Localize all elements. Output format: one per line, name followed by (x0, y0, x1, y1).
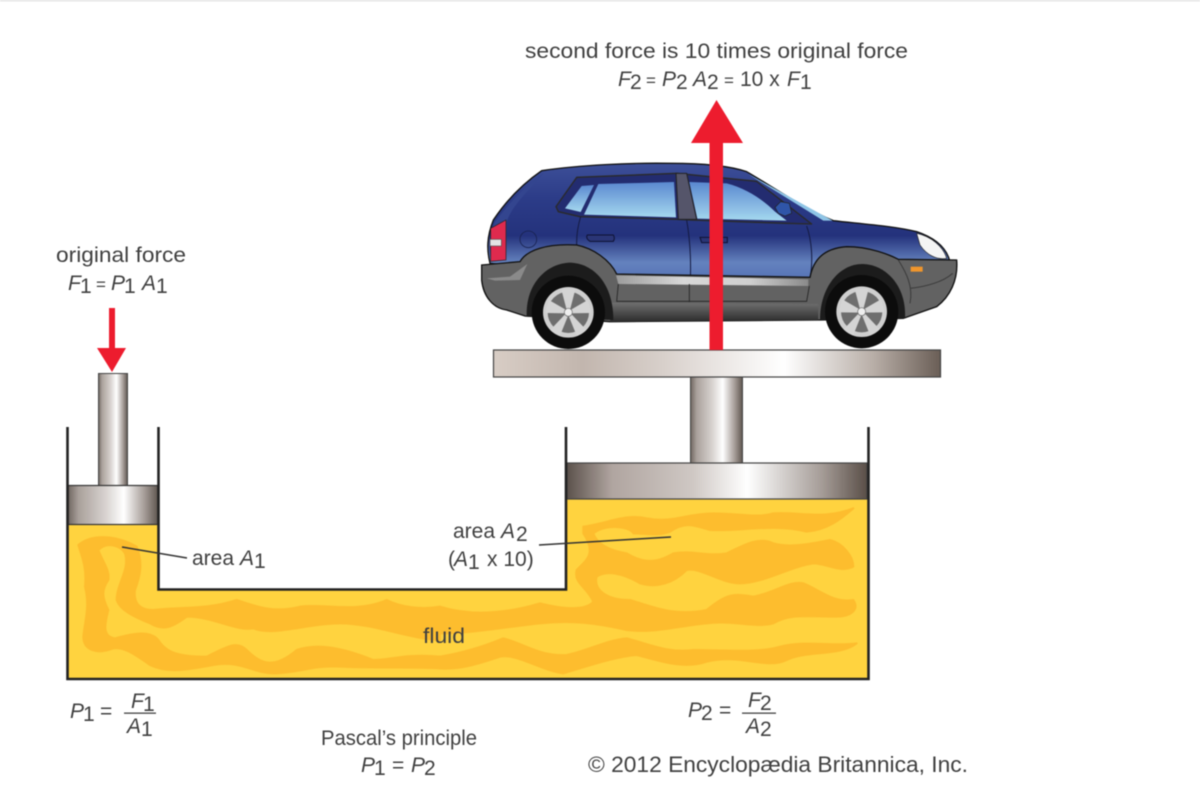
label: area A2: A (499, 520, 515, 543)
label: original force formula: 1 (156, 275, 168, 298)
right piston head (567, 463, 867, 499)
formula: P1: P (70, 700, 84, 723)
label: second force heading: second force is 10 times original force (525, 39, 908, 63)
rear door glass (584, 182, 676, 217)
rear wheel (532, 276, 605, 349)
formula: P1 = P2: 2 (424, 757, 436, 780)
rear quarter glass (565, 185, 594, 212)
formula: P1 (70, 690, 156, 741)
label: area A1: 1 (254, 550, 266, 573)
label: second force formula: 10 x (740, 68, 780, 91)
label: second force formula: 2 (676, 71, 688, 94)
label: second force formula: 1 (800, 71, 812, 94)
label: second force formula: A (691, 68, 707, 91)
car (482, 163, 957, 349)
label: original force formula: = (96, 275, 106, 294)
reverse light (490, 239, 501, 246)
label: second force formula: = (724, 71, 734, 90)
windshield strip (748, 174, 833, 221)
lower gray cladding (482, 245, 957, 322)
label: area A1: A (238, 547, 254, 570)
leader: area A1 (122, 547, 187, 558)
formula: P2: = (719, 699, 731, 722)
label: second force formula: = (646, 71, 656, 90)
formula: P1: 1 (143, 693, 155, 716)
front wheel arch (820, 264, 905, 320)
rear bumper highlight (487, 264, 527, 281)
left piston rod (98, 374, 128, 486)
label: A1 x 10: A (452, 548, 468, 571)
formula: P1 = P2: P (411, 754, 425, 777)
label: second force formula: 2 (630, 71, 642, 94)
leader: area A2 (539, 537, 671, 545)
formula: P2: F (748, 689, 762, 712)
label: fluid: fluid (423, 624, 465, 648)
hydraulic fluid (68, 499, 868, 679)
rear wheel arch (527, 263, 613, 320)
formula: P1 = P2: 1 (374, 757, 386, 780)
front bumper detail (898, 260, 953, 303)
front door glass (689, 182, 787, 221)
car upper body (488, 163, 950, 280)
top edge line (0, 0, 1200, 2)
rear pillar shade (490, 173, 544, 260)
formula: P1: = (100, 700, 112, 723)
turn signal (911, 267, 923, 272)
right piston rod (690, 376, 742, 463)
label: second force formula: 2 (707, 71, 719, 94)
door lines (577, 217, 812, 302)
formula: P2: 2 (701, 702, 713, 725)
fluid swirl: right upper (440, 508, 855, 633)
b pillar (676, 173, 697, 219)
label: second force formula: F (618, 68, 632, 91)
formula: P2: 2 (760, 718, 772, 741)
formula: P1: F (131, 690, 145, 713)
sill shade (610, 303, 818, 322)
fuel cap (520, 231, 537, 248)
label: second force formula: P (662, 68, 676, 91)
credit: © 2012 Encyclopædia Britannica, Inc. (588, 752, 968, 777)
arrow: original force (97, 308, 126, 372)
label: area A2: 2 (516, 523, 528, 546)
label: original force formula: P (111, 272, 125, 295)
label: A1 x 10: ( (448, 548, 455, 571)
label: original force formula: F (68, 272, 82, 295)
label: A1 x 10: x 10) (487, 548, 534, 571)
label: area A2: area (453, 520, 495, 543)
left piston head (68, 486, 158, 524)
formula: P1: A (125, 715, 141, 738)
silver stripe (616, 275, 808, 286)
formula: P1: 1 (83, 703, 95, 726)
formula: P1 = P2: = (392, 754, 404, 777)
rocker lines (617, 284, 809, 302)
formula: P1: 1 (141, 718, 153, 741)
formula: P1 = P2: P (361, 754, 375, 777)
label: original force formula: A (140, 272, 156, 295)
formula: P2: P (688, 699, 702, 722)
fluid swirl: left (78, 537, 440, 673)
headlight (917, 233, 947, 259)
label: A1 x 10: 1 (468, 551, 480, 574)
front wheel (825, 275, 898, 348)
door handles (587, 235, 727, 243)
mirror (775, 202, 792, 216)
label: Pascal's principle: Pascal’s principle (321, 726, 477, 750)
formula: P2 (688, 689, 776, 741)
lift platform (494, 350, 940, 377)
label: original force heading: original force (56, 243, 186, 267)
label: area A1: area (192, 547, 234, 570)
fluid swirl: right lower (440, 638, 857, 673)
label: original force formula: 1 (80, 275, 92, 298)
formula: P2: 2 (760, 692, 772, 715)
label: second force formula: F (787, 68, 801, 91)
container walls (68, 427, 868, 679)
label: original force formula: 1 (124, 275, 136, 298)
arrow: second force (691, 100, 743, 350)
tail light (491, 220, 506, 261)
formula: P2: A (744, 715, 760, 738)
window frame (556, 173, 812, 224)
